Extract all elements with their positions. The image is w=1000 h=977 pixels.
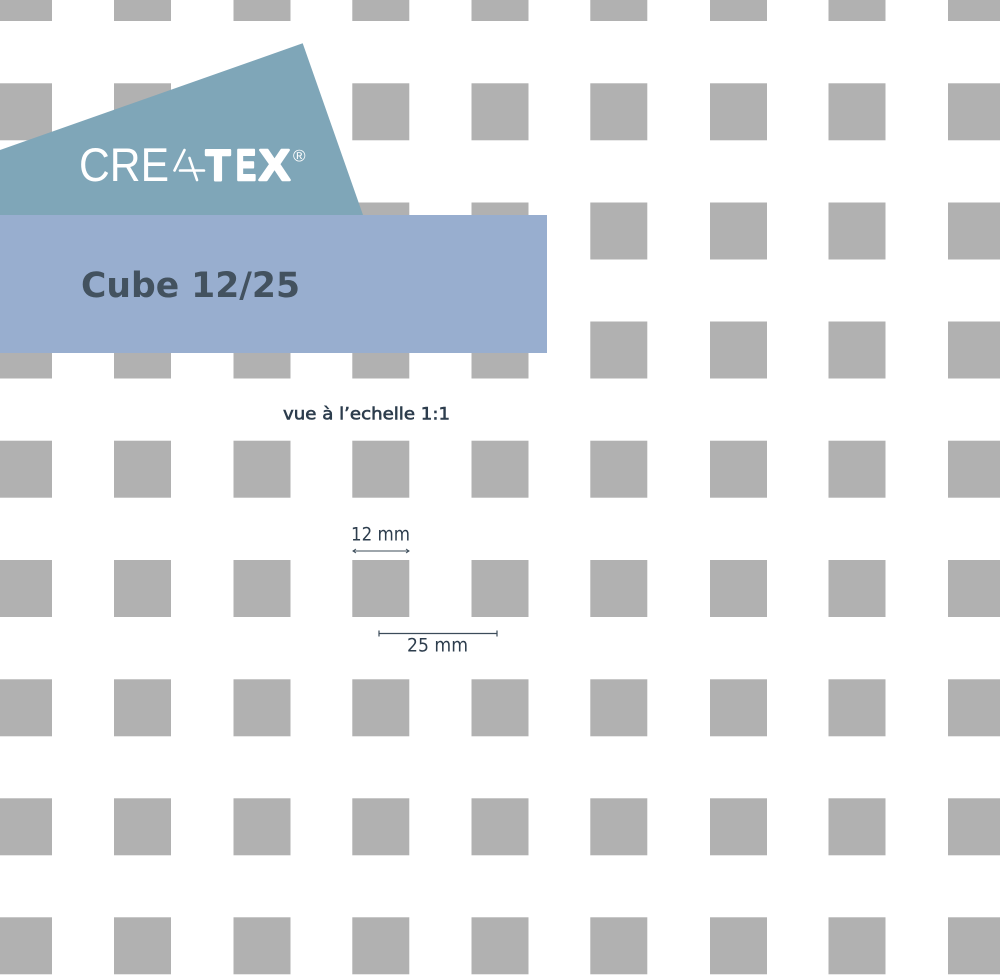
scale caption: vue à l’echelle 1:1: [283, 404, 450, 424]
dimension label: 25 mm: 25 mm: [407, 634, 468, 656]
panel: teal logo banner: [0, 43, 363, 215]
logo wordmark: CRE: CRE: [79, 138, 169, 191]
logo: Createx: [79, 138, 306, 191]
dimension label: 12 mm: 12 mm: [351, 524, 410, 546]
arrow: 12 mm span: [353, 549, 409, 553]
dimension: 12 mm square width: [351, 524, 410, 553]
logo wordmark: TEX: T: [206, 141, 231, 190]
logo registered mark: ®: [293, 146, 306, 166]
dimension: 25 mm pitch: [379, 630, 497, 656]
logo wordmark: TEX: X: [259, 141, 290, 190]
dimension line: 25 mm span: [379, 630, 497, 636]
logo wordmark: TEX: E: [236, 141, 256, 190]
logo wordmark: TEX: [206, 141, 290, 190]
panel: blue title band: [0, 215, 547, 353]
logo icon: stylised A: [174, 150, 204, 180]
title: Cube 12/25: [81, 266, 300, 306]
